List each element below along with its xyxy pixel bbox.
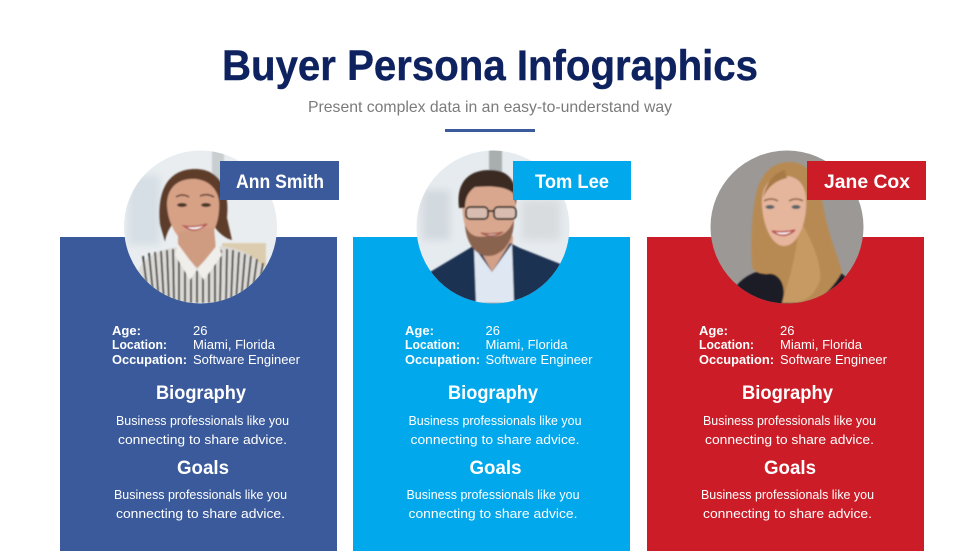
goals: Tom Lee: Business professionals like you (406, 487, 580, 502)
name tag: Ann Smith (220, 161, 339, 200)
name tag: Jane Cox: Jane Cox (824, 172, 910, 193)
goals: Jane Cox: connecting to share advice. (703, 506, 872, 521)
biography: Tom Lee: Biography (448, 383, 538, 404)
details: Jane Cox: Miami, Florida (780, 337, 863, 352)
goals: Tom Lee: Goals (470, 458, 522, 479)
panel: Jane Cox (647, 148, 926, 551)
panel background (353, 237, 630, 551)
biography: Jane Cox (703, 383, 876, 447)
details: Ann Smith: Miami, Florida (193, 337, 276, 352)
biography: Jane Cox: connecting to share advice. (705, 432, 874, 447)
details: Ann Smith: Location: (112, 337, 167, 352)
details: Tom Lee: 26 (486, 323, 500, 338)
details: Tom Lee: Age: (405, 323, 434, 338)
biography: Ann Smith (116, 383, 289, 447)
goals: Ann Smith: Goals (177, 458, 229, 479)
panel background (60, 237, 337, 551)
details: Ann Smith: Software Engineer (193, 352, 301, 367)
biography: Tom Lee (408, 383, 582, 447)
details: Jane Cox: Occupation: (699, 352, 774, 367)
title underline (445, 129, 535, 132)
details: Tom Lee: Miami, Florida (486, 337, 568, 352)
biography: Ann Smith: Biography (156, 383, 246, 404)
details: Ann Smith: Age: (112, 323, 141, 338)
details: Tom Lee: Software Engineer (486, 352, 593, 367)
panel: Ann Smith (60, 148, 339, 551)
goals: Ann Smith (114, 458, 287, 521)
goals: Jane Cox: Business professionals like you (701, 487, 874, 502)
biography: Ann Smith: connecting to share advice. (118, 432, 287, 447)
details: Ann Smith: 26 (193, 323, 207, 338)
details: Ann Smith (112, 323, 301, 367)
biography: Tom Lee: connecting to share advice. (410, 432, 580, 447)
name tag: Tom Lee: Tom Lee (535, 172, 609, 193)
details: Tom Lee (405, 323, 593, 367)
biography: Jane Cox: Biography (742, 383, 833, 404)
subtitle: Present complex data in an easy-to-understand way (308, 99, 672, 116)
name tag: Jane Cox (807, 161, 926, 200)
biography: Tom Lee: Business professionals like you (408, 413, 582, 428)
biography: Jane Cox: Business professionals like you (703, 413, 876, 428)
portrait: Jane Cox (710, 150, 864, 304)
details: Jane Cox: Software Engineer (780, 352, 888, 367)
name tag: Ann Smith: Ann Smith (236, 172, 324, 193)
name tag: Tom Lee (513, 161, 631, 200)
portrait: Ann Smith (120, 148, 280, 308)
details: Jane Cox: Location: (699, 337, 754, 352)
goals: Jane Cox: Goals (764, 458, 816, 479)
panel: Tom Lee (353, 148, 631, 551)
portrait: Tom Lee (412, 148, 572, 310)
details: Jane Cox (699, 323, 888, 367)
details: Tom Lee: Location: (405, 337, 460, 352)
goals: Ann Smith: connecting to share advice. (116, 506, 285, 521)
goals: Tom Lee: connecting to share advice. (408, 506, 578, 521)
title: Buyer Persona Infographics (222, 42, 758, 90)
details: Ann Smith: Occupation: (112, 352, 187, 367)
biography: Ann Smith: Business professionals like you (116, 413, 289, 428)
details: Jane Cox: 26 (780, 323, 794, 338)
panel background (647, 237, 924, 551)
goals: Tom Lee (406, 458, 580, 521)
details: Tom Lee: Occupation: (405, 352, 480, 367)
details: Jane Cox: Age: (699, 323, 728, 338)
goals: Ann Smith: Business professionals like you (114, 487, 287, 502)
goals: Jane Cox (701, 458, 874, 521)
